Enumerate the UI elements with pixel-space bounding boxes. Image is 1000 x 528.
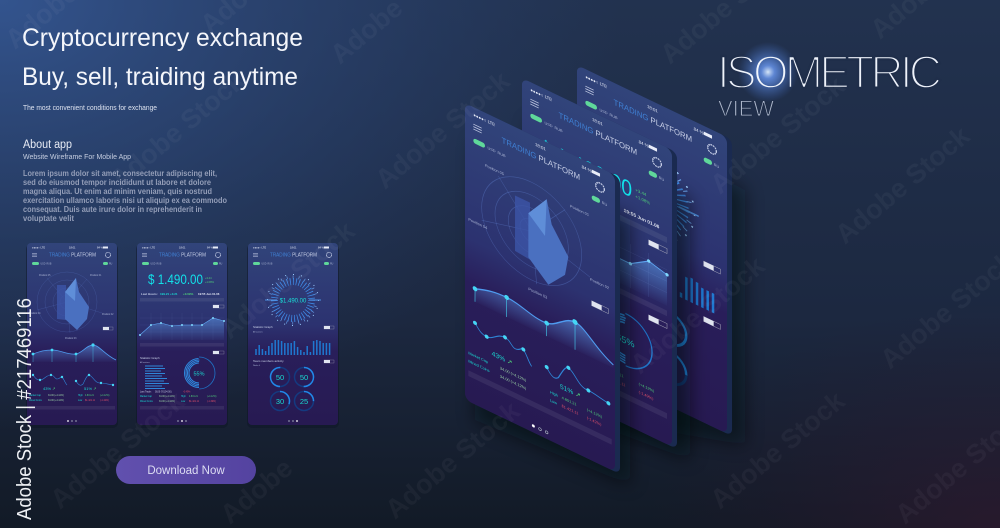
market data: 34.00 (+4.12%) [159, 396, 175, 398]
radar chart: Position 03 [65, 337, 77, 340]
sunburst gauge [265, 274, 321, 326]
isometric phone: back [577, 65, 745, 445]
market data: High [78, 395, 83, 397]
radar chart: Position 02 [102, 313, 114, 316]
team activity: 50 [276, 373, 284, 382]
team activity: Team members activity [253, 359, 284, 363]
menu icon [253, 254, 258, 256]
toggles [32, 262, 113, 266]
toggle [213, 351, 224, 354]
toggle [213, 305, 224, 308]
watermark pattern: Adobe Stock [370, 65, 516, 195]
watermark pattern: Adobe Stock [380, 395, 526, 525]
last hours [141, 292, 220, 296]
status bar: 84 % [97, 246, 104, 250]
watermark pattern: Adobe Stock [705, 70, 851, 200]
statistic list: All locations [140, 361, 150, 364]
status bar: 84 % [318, 246, 325, 250]
axis row [140, 406, 224, 410]
market data: (-1.49%) [207, 401, 216, 403]
pager dots [67, 420, 77, 422]
statistic bar chart [253, 325, 334, 355]
download button: Download Now [147, 465, 225, 477]
market data: 34.00 (+4.12%) [48, 395, 64, 397]
toggles [142, 262, 223, 266]
toggles: USD [150, 264, 156, 266]
statistic list [140, 356, 169, 388]
gear icon [215, 252, 221, 258]
toggle [103, 327, 113, 330]
team activity: Weeks 4 [253, 365, 260, 367]
axis row [140, 343, 224, 346]
toggles: RU [109, 264, 113, 266]
toggles: RUB [46, 264, 52, 266]
small phone: radar screen [26, 243, 118, 428]
radar chart: Position 05 [39, 274, 51, 277]
last hours: 19:55 Jun 01.06 [198, 292, 220, 296]
wave charts: 43% ↗ [43, 386, 55, 391]
market data: $1.421.11 [85, 400, 96, 402]
toggles: RUB [156, 264, 162, 266]
status bar: 18:01 [290, 246, 297, 250]
status bar: ●●●●○ LTE [253, 246, 266, 250]
watermark pattern: Adobe Stock [830, 120, 976, 250]
status bar [142, 246, 218, 250]
title: Buy, sell, traiding anytime [22, 63, 298, 91]
area chart [32, 343, 116, 362]
status bar [32, 246, 108, 250]
text block: about app: exercitation ullamco laboris nisi ut aliquip ex ea commodo [23, 196, 227, 205]
toggles: USD [40, 264, 46, 266]
market data: Last Trade: [140, 390, 152, 394]
time axis row [29, 406, 115, 410]
market data: (+4.12%) [207, 396, 217, 398]
toggles: RUB [268, 264, 273, 266]
gear icon [105, 252, 111, 258]
text block: about app: Lorem ipsum dolor sit amet, consectetur adipiscing elit, [23, 169, 217, 178]
watermark pattern: Adobe Stock [215, 215, 361, 345]
team activity: 50 [300, 373, 308, 382]
sunburst gauge: $1.490.00 [280, 298, 307, 304]
donut 55%: 55% [193, 372, 205, 378]
team activity: 30 [276, 397, 284, 406]
text block: about app [23, 139, 227, 223]
market data: Low [181, 401, 186, 403]
heading: isometric view: ISOMETRIC [717, 46, 942, 98]
text block: about app: consequat. Duis aute irure dolor in reprehenderit in [23, 205, 202, 214]
pager dots [288, 420, 298, 422]
market data [29, 394, 110, 402]
toggles: RU [330, 264, 334, 266]
text block: about app: sed do eiusmod tempor incididunt ut labore et dolore [23, 178, 212, 187]
market data: Market Cap [29, 394, 42, 397]
heading: isometric view [717, 42, 942, 121]
line chart [139, 313, 225, 340]
statistic bar chart: Statistic Graph [253, 325, 273, 329]
text block: about app: magna aliqua. Ut enim ad minim veniam, quis nostrud [23, 187, 212, 196]
pager dots [177, 420, 187, 422]
price: +1.08% [205, 280, 215, 284]
radar chart: Position 04 [29, 312, 41, 315]
wave charts [32, 374, 114, 391]
market data: 34.00 (+4.12%) [48, 400, 64, 402]
title [22, 24, 303, 91]
download button [116, 456, 256, 484]
status bar: 18:01 [69, 246, 76, 250]
price: +3.44 [205, 276, 212, 280]
market data: Market Cap [140, 395, 153, 398]
lens glow [738, 42, 798, 102]
market data: 4.801.21 [85, 395, 95, 397]
status bar [253, 246, 329, 250]
toggles [253, 262, 334, 266]
market data: Low [78, 400, 83, 402]
radar chart: Position 01 [90, 274, 102, 277]
market data: Mined Coins [140, 401, 154, 403]
stock id text: Adobe Stock | #217469116 [13, 298, 36, 520]
watermark pattern: Adobe Stock [105, 65, 251, 195]
title: Cryptocurrency exchange [22, 24, 303, 52]
market data: Mined Coins [29, 400, 43, 402]
status bar: 84 % [207, 246, 214, 250]
status bar: ●●●●○ LTE [32, 246, 45, 250]
statistic list: Statistic Graph [140, 356, 160, 360]
market data: 0100 (*0104.00) [155, 392, 172, 394]
small phone: price screen [136, 243, 228, 428]
market data: (-1.42%) [100, 400, 109, 402]
market data: (+4.12%) [100, 395, 110, 397]
gear icon [326, 252, 332, 258]
text block: about app: About app [23, 139, 72, 151]
last hours: 199.21 +0.21 [160, 292, 178, 296]
last hours: +0.09% [183, 292, 194, 296]
toggles: USD [262, 264, 267, 266]
watermark pattern: Adobe Stock [705, 385, 851, 515]
market data: High [181, 396, 186, 398]
market data: 34.00 (+4.12%) [159, 401, 175, 403]
axis row [140, 298, 224, 302]
last hours: Last Hours: [141, 292, 158, 296]
subtitle: The most convenient conditions for exchange [23, 105, 157, 112]
watermark pattern: Adobe Stock [45, 385, 191, 515]
text block: about app: voluptate velit [23, 214, 74, 223]
market data: $1.421.11 [189, 401, 200, 403]
team activity: 25 [300, 397, 308, 406]
watermark pattern: Adobe Stock [625, 250, 771, 380]
heading: isometric view: VIEW [718, 96, 774, 121]
text block: about app: Website Wireframe For Mobile App [23, 152, 131, 161]
small phone: activity screen [247, 243, 339, 428]
menu icon [32, 254, 37, 256]
isometric phone: front [465, 103, 630, 485]
watermark pattern: Adobe [215, 453, 298, 528]
price: $ 1.490.00 [148, 272, 203, 287]
status bar: ●●●●○ LTE [142, 246, 155, 250]
market data [140, 390, 217, 403]
wave charts: 51% ↗ [84, 386, 96, 391]
statistic bar chart: All locations [253, 330, 263, 334]
heading: TRADING PLATFORM [159, 252, 206, 258]
heading: TRADING PLATFORM [270, 252, 317, 258]
status bar: 18:01 [179, 246, 186, 250]
team activity [253, 359, 334, 410]
market data: 4.801.21 [189, 396, 199, 398]
menu icon [142, 254, 147, 256]
radar chart [29, 272, 114, 340]
donut 55% [183, 357, 215, 389]
isometric phone: middle [522, 78, 690, 460]
toggles: RU [219, 264, 223, 266]
heading: TRADING PLATFORM [49, 252, 96, 258]
market data: -0.49% [183, 392, 190, 394]
